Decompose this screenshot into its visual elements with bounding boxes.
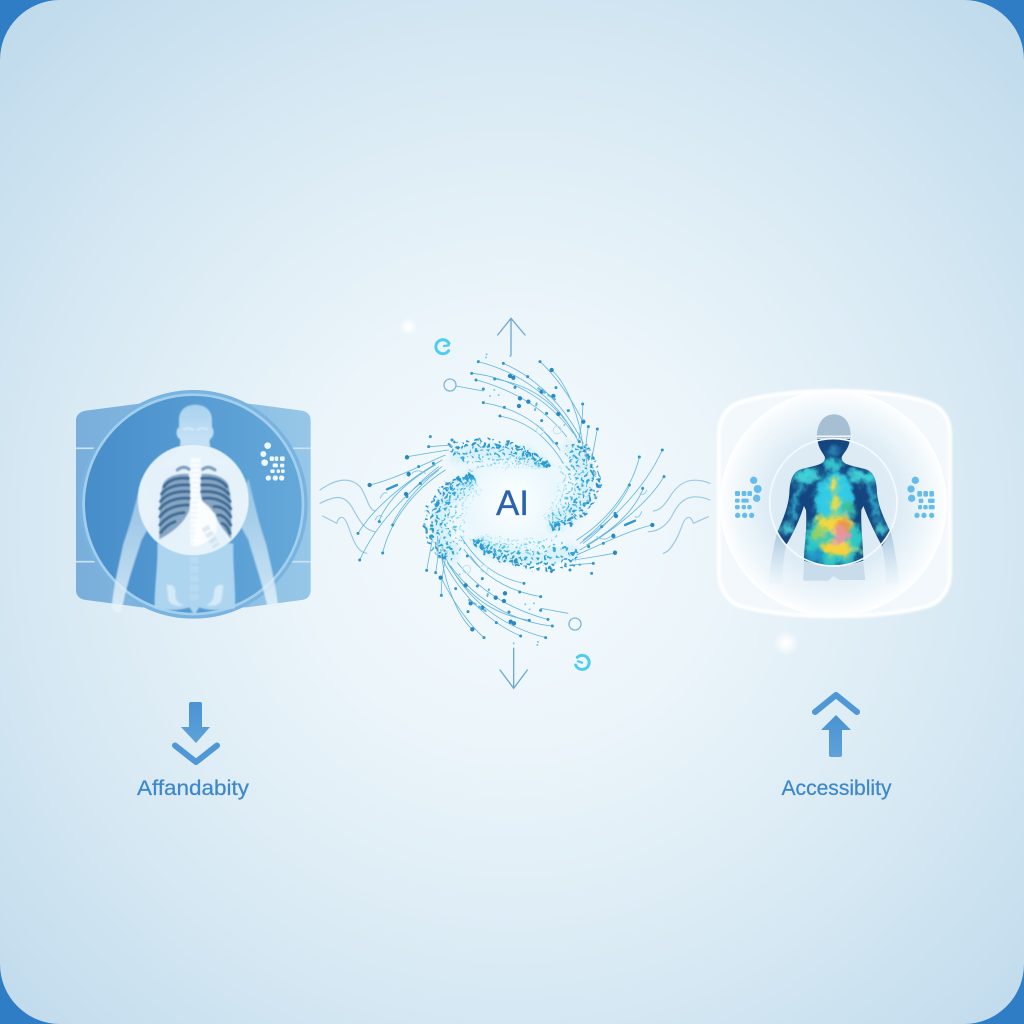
icon: data dots right: [907, 477, 935, 518]
inner ring: [770, 439, 897, 566]
scanner disc: [79, 390, 308, 619]
scanner plate: [76, 403, 311, 607]
sparkle: below right panel: [773, 630, 799, 656]
panel: AI swirl: [320, 317, 710, 688]
label: Accessiblity: Accessiblity: [782, 777, 892, 800]
icon: cycle bottom: [576, 655, 589, 669]
lens with lungs: [137, 444, 249, 556]
wave lines: left: [320, 480, 375, 553]
icon: data dots left: [735, 477, 762, 518]
spiral arms: [358, 354, 664, 645]
glass disc: [721, 391, 946, 616]
node: upper ring: [444, 379, 456, 391]
heat-map body: [778, 439, 891, 566]
icon: data dots: [260, 442, 285, 481]
icon: cycle top: [436, 340, 449, 354]
label: Affandabity: Affandabity: [137, 777, 250, 800]
icon: affordability down arrow: [175, 702, 217, 762]
ghost head and limbs: [768, 414, 899, 583]
arrow: up: [498, 318, 525, 355]
skeleton body: [112, 405, 278, 615]
icon: accessibility up arrow: [815, 695, 857, 757]
node: lower ring: [569, 618, 581, 630]
glass plate: [719, 391, 950, 616]
panel: X-ray scan (affordability): [76, 390, 311, 619]
sparkle: [399, 317, 418, 336]
panel: heat-map scan (accessibility): [719, 391, 950, 616]
heading: AI: AI: [496, 484, 529, 523]
core glow: [435, 425, 589, 579]
wave lines: right: [648, 480, 710, 553]
arrow: down: [500, 648, 527, 688]
